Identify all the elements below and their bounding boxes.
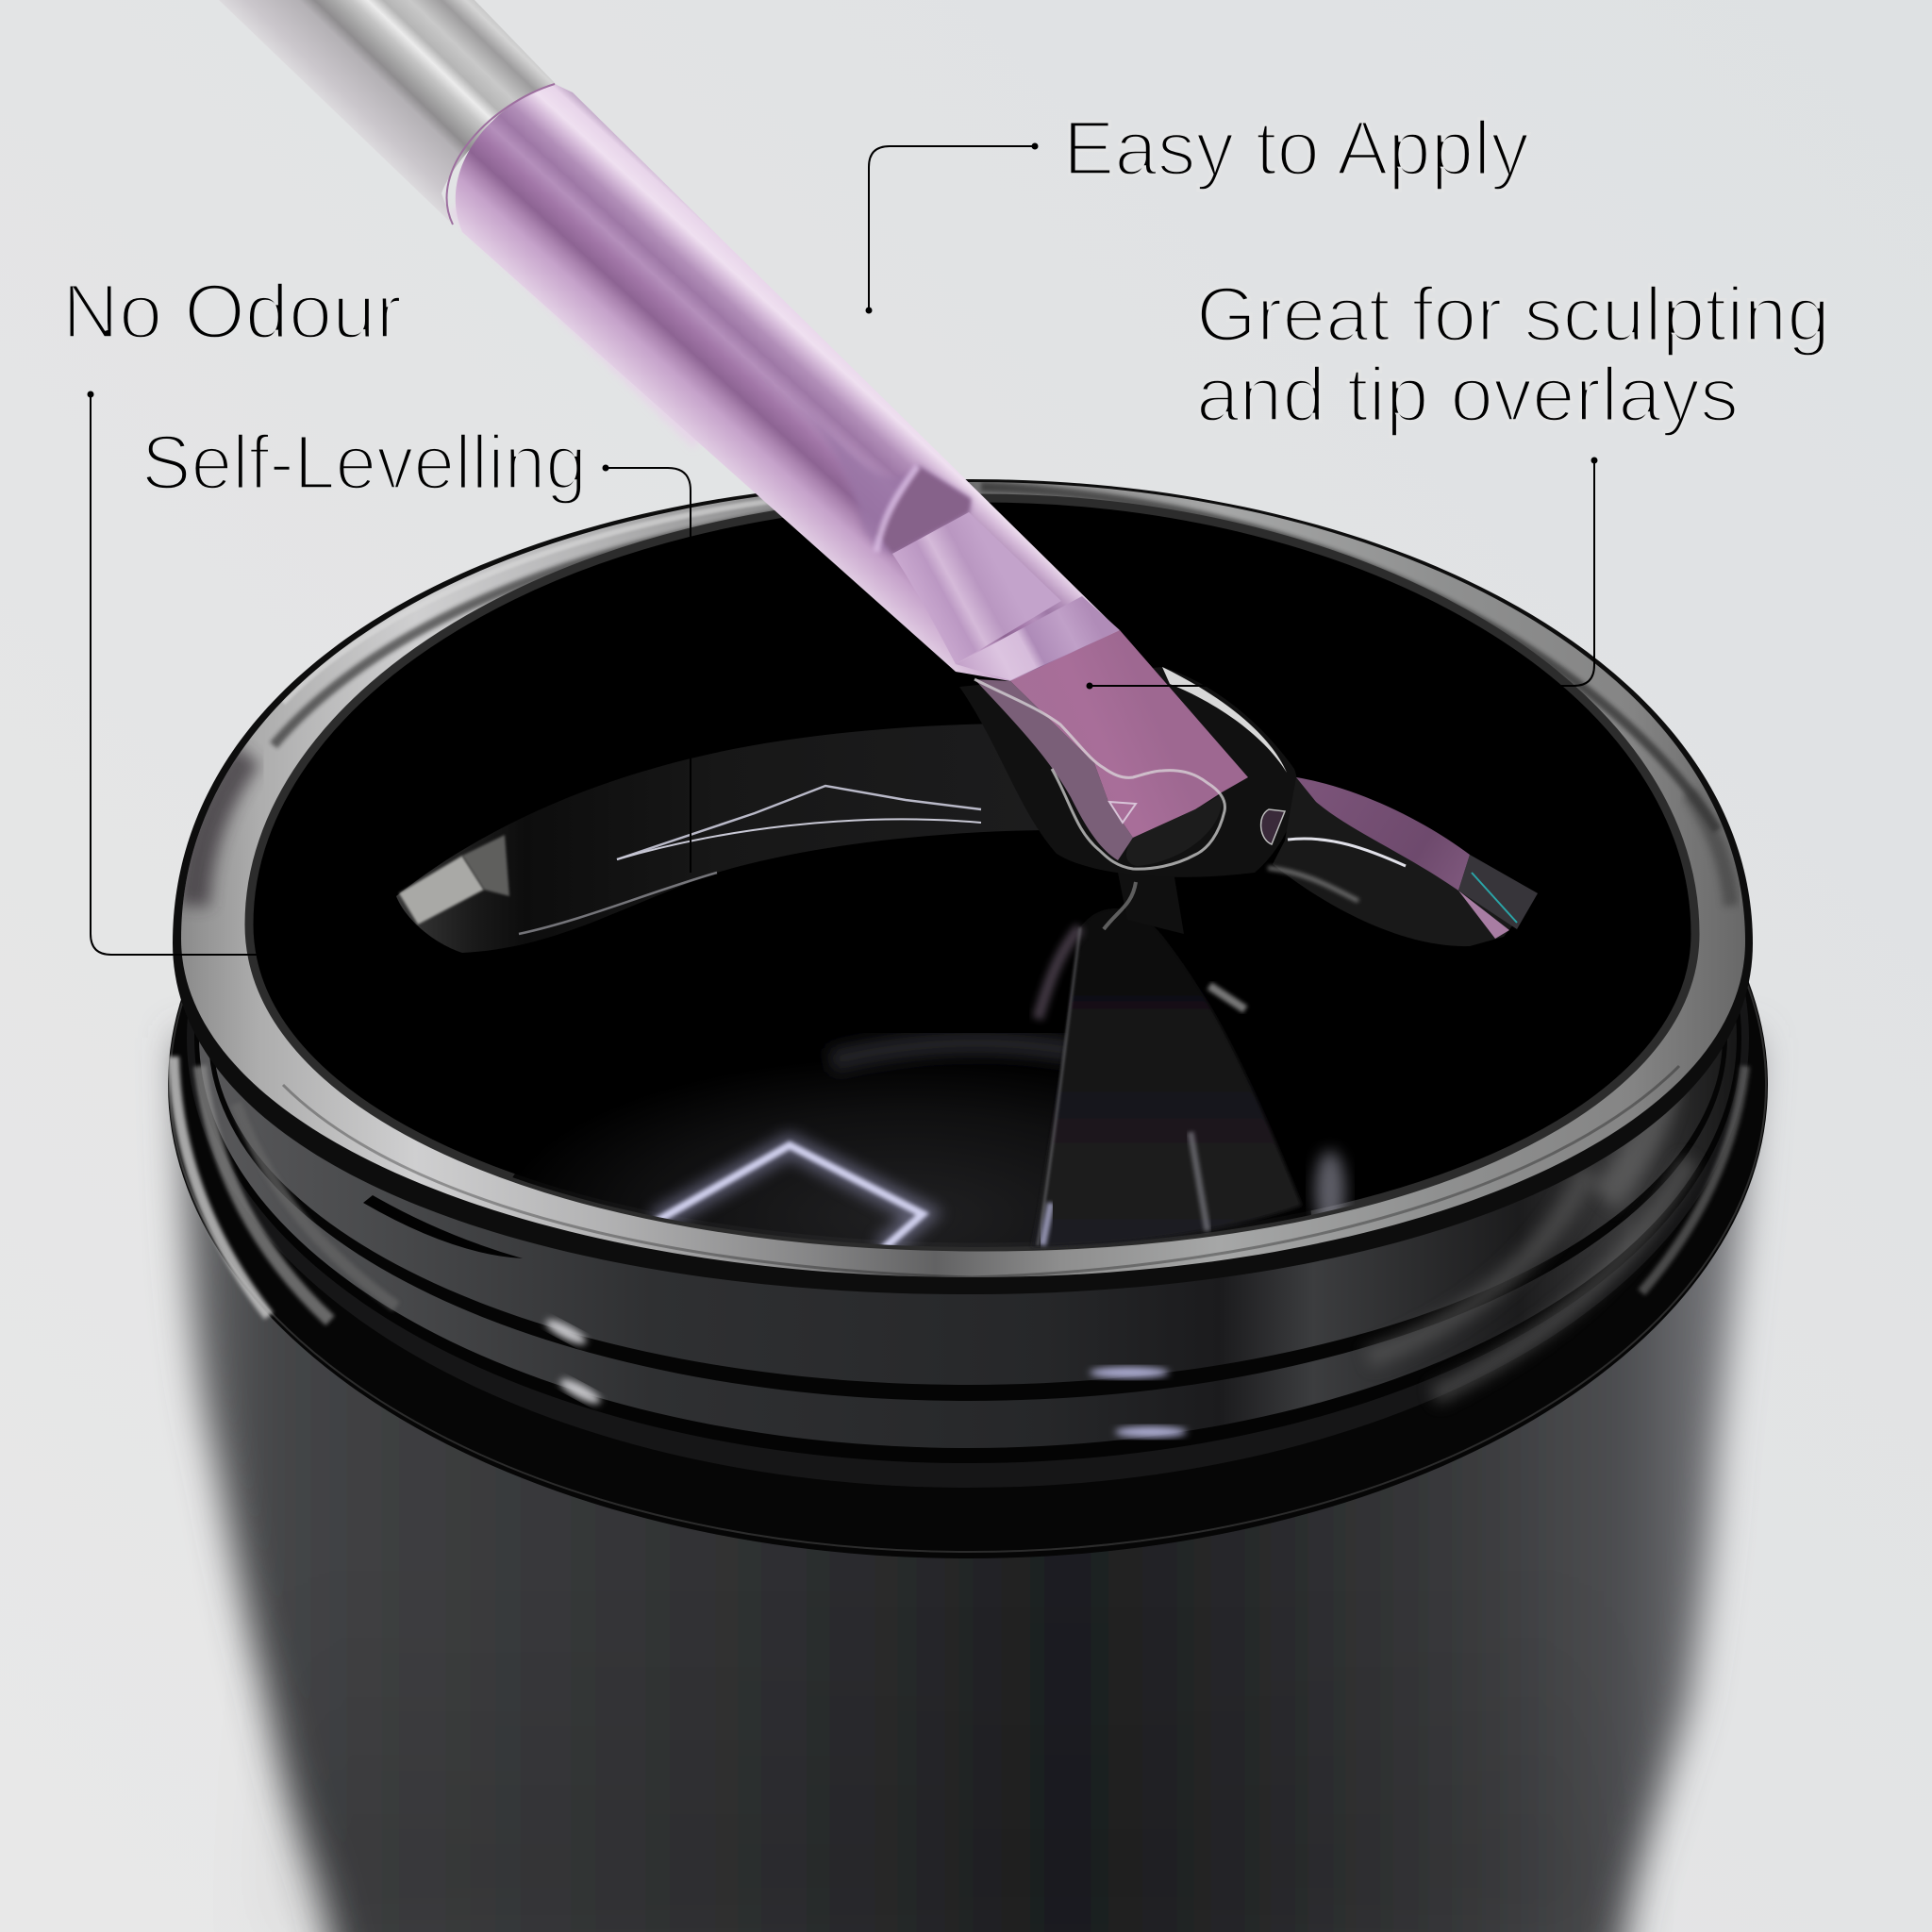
callout: No Odour: [62, 269, 402, 955]
callout: Easy to Apply: [866, 106, 1529, 313]
ring between silver and ferrule: [447, 84, 555, 225]
callout: Great for sculpting and tip overlays: [1087, 272, 1830, 689]
jar: [168, 479, 1768, 1932]
jar opening: [249, 498, 1695, 1247]
gel swirl and nail tip shine: [1261, 777, 1538, 946]
gel blob on bristle tip: [974, 667, 1287, 869]
leader line: Self-Levelling: [602, 464, 691, 873]
silver handle: [219, 0, 557, 225]
bristles: [1010, 630, 1248, 838]
rim: [173, 479, 1753, 1294]
leader line: Great for sculpting: [1087, 457, 1598, 689]
gel under brush: [959, 667, 1298, 877]
callout: Self-Levelling: [142, 420, 691, 873]
gel column falling from brush: [1032, 849, 1302, 1247]
leader line: No Odour: [87, 391, 270, 955]
label: Great for sculpting: Great for sculpting: [1196, 272, 1830, 358]
gel arch on the left: [396, 724, 1057, 953]
leader line: Easy to Apply: [866, 143, 1038, 313]
jar body: [179, 1038, 1755, 1932]
ferrule shadow crease: [755, 373, 1061, 664]
metallic ferrule: [456, 84, 1123, 681]
label: No Odour: No Odour: [62, 269, 402, 355]
label: and tip overlays: and tip overlays: [1196, 352, 1739, 438]
ferrule crimp band: [956, 596, 1120, 680]
brush: [219, 0, 1538, 946]
interior reflections: [513, 1033, 1355, 1247]
label: Easy to Apply: Easy to Apply: [1063, 106, 1529, 192]
rim shading: [193, 487, 1731, 1277]
soft edge of ferrule: [448, 189, 726, 448]
label: Self-Levelling: Self-Levelling: [142, 420, 587, 506]
screw threads: [168, 981, 1768, 1558]
